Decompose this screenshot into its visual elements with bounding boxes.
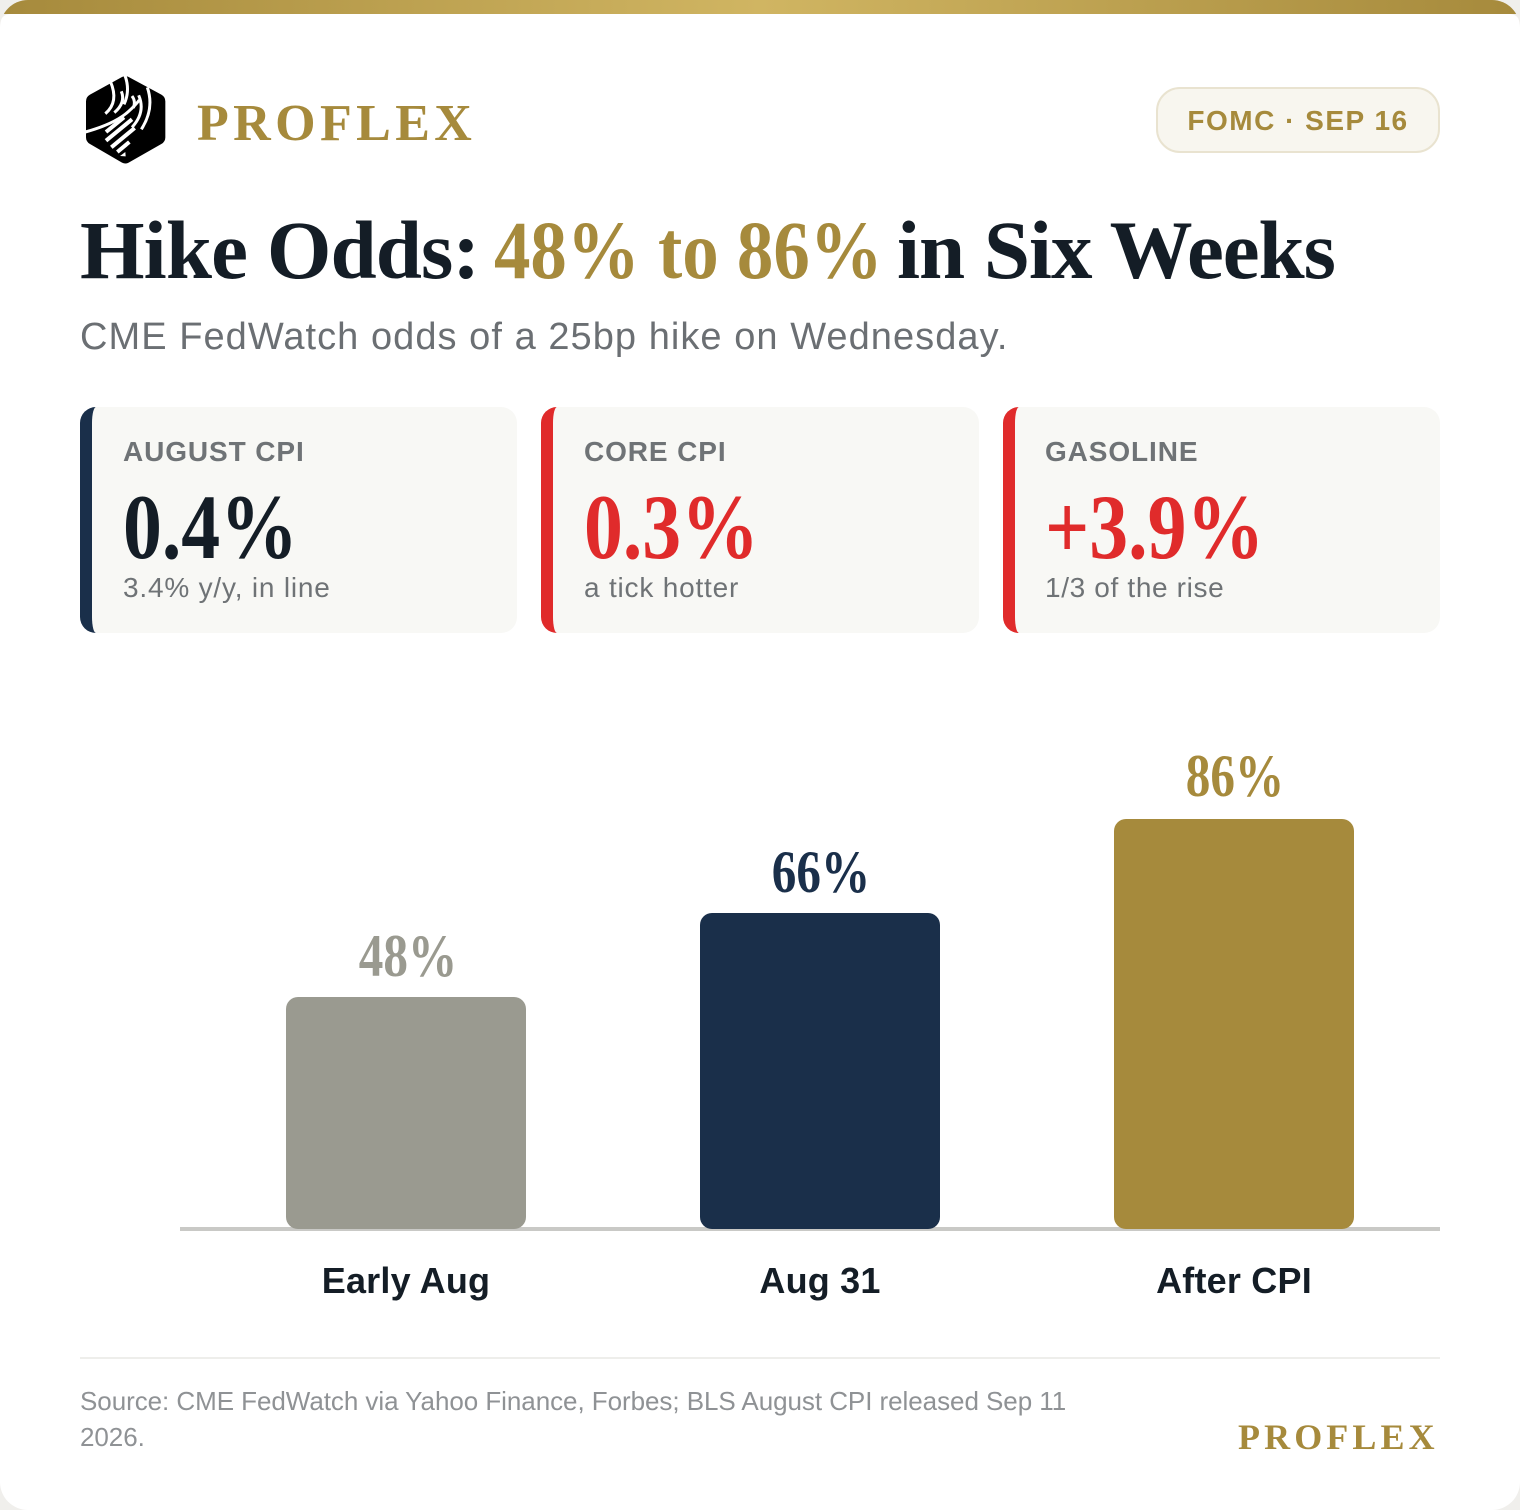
bar chart	[180, 743, 1440, 1301]
subtitle: CME FedWatch odds of a 25bp hike on Wednesday.	[80, 316, 1008, 358]
value: 48%: 48%	[359, 923, 457, 989]
footer rule	[80, 1357, 1440, 1359]
bar: After CPI	[1114, 819, 1354, 1229]
panel: Gasoline: +3.9%	[1045, 476, 1264, 578]
source note: Source: CME FedWatch via Yahoo Finance, Forbes; BLS August CPI released Sep 11	[80, 1386, 1066, 1416]
source note: 2026.	[80, 1422, 145, 1452]
label: Early Aug: Early Aug	[322, 1260, 490, 1301]
panel: August CPI	[80, 407, 517, 633]
panel: Gasoline	[1003, 407, 1440, 633]
brand name: PROFLEX	[197, 95, 476, 152]
panel: Core CPI	[541, 407, 979, 633]
panel: Gasoline: 1/3 of the rise	[1045, 572, 1224, 603]
icon: proflex logo	[86, 76, 166, 164]
bar: Aug 31	[700, 913, 940, 1229]
panel: August CPI: 0.4%	[123, 476, 298, 578]
title: in Six Weeks	[897, 204, 1335, 296]
panel: August CPI: AUGUST CPI	[123, 436, 305, 467]
footer brand: PROFLEX	[1238, 1417, 1439, 1457]
top gold band	[0, 0, 1520, 14]
panel: August CPI: 3.4% y/y, in line	[123, 572, 331, 603]
title: Hike Odds:	[80, 204, 479, 296]
title	[80, 204, 1335, 296]
panel: Core CPI: 0.3%	[584, 476, 759, 578]
panel: Core CPI: a tick hotter	[584, 572, 739, 603]
label: After CPI: After CPI	[1156, 1260, 1312, 1301]
badge: FOMC date: FOMC · SEP 16	[1187, 105, 1409, 136]
badge: FOMC date	[1156, 87, 1440, 153]
source note	[80, 1386, 1066, 1452]
label: Aug 31: Aug 31	[759, 1260, 881, 1301]
panel: Gasoline: GASOLINE	[1045, 436, 1198, 467]
value: 66%: 66%	[772, 839, 870, 905]
title: 48% to 86%	[494, 204, 883, 296]
value: 86%: 86%	[1186, 743, 1284, 809]
axis line	[180, 1227, 1440, 1231]
bar: Early Aug	[286, 997, 526, 1229]
panel: Core CPI: CORE CPI	[584, 436, 727, 467]
